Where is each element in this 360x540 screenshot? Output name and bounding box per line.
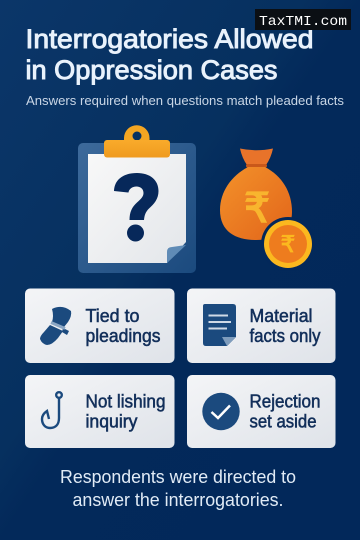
- card: tied to pleadings: pleadings: [86, 325, 160, 346]
- icon: clipboard with question mark: [78, 125, 196, 273]
- title line 2: in Oppression Cases: [26, 55, 278, 85]
- card: material facts only: [187, 288, 336, 363]
- icon: document: [203, 304, 236, 346]
- card: material facts only: facts only: [250, 325, 321, 346]
- label: Material: [250, 305, 312, 326]
- card: tied to pleadings: [25, 288, 174, 363]
- icon: rupee money bag with coin: [220, 148, 315, 271]
- card: not fishing inquiry: inquiry: [86, 410, 138, 432]
- coin: [261, 217, 315, 271]
- watermark: TaxTMI.com: TaxTMI.com: [259, 14, 347, 30]
- clip bar: [104, 140, 170, 158]
- label: Rejection: [250, 390, 320, 412]
- conclusion line 1: Respondents were directed to: [60, 466, 296, 487]
- watermark: TaxTMI.com: [255, 9, 351, 30]
- subtitle: Answers required when questions match pleaded facts: [26, 93, 344, 108]
- card: not fishing inquiry: [25, 375, 174, 448]
- icon: check circle: [202, 393, 240, 430]
- conclusion line 2: answer the interrogatories.: [72, 489, 284, 510]
- title: Interrogatories Allowed: [26, 24, 314, 54]
- label: Not lishing: [86, 390, 166, 412]
- card: rejection set aside: [187, 375, 336, 448]
- icon: rupee money bag with coin: ₹: [281, 232, 295, 258]
- question dot: [127, 224, 144, 242]
- icon: scroll: [40, 307, 71, 345]
- paper fold: [167, 245, 186, 263]
- card: rejection set aside: set aside: [250, 410, 316, 432]
- rupee on bag: ₹: [244, 184, 270, 232]
- question mark: [114, 173, 158, 220]
- label: Tied to: [86, 305, 140, 326]
- icon: fish hook: [42, 392, 62, 428]
- clip ring: [124, 125, 150, 146]
